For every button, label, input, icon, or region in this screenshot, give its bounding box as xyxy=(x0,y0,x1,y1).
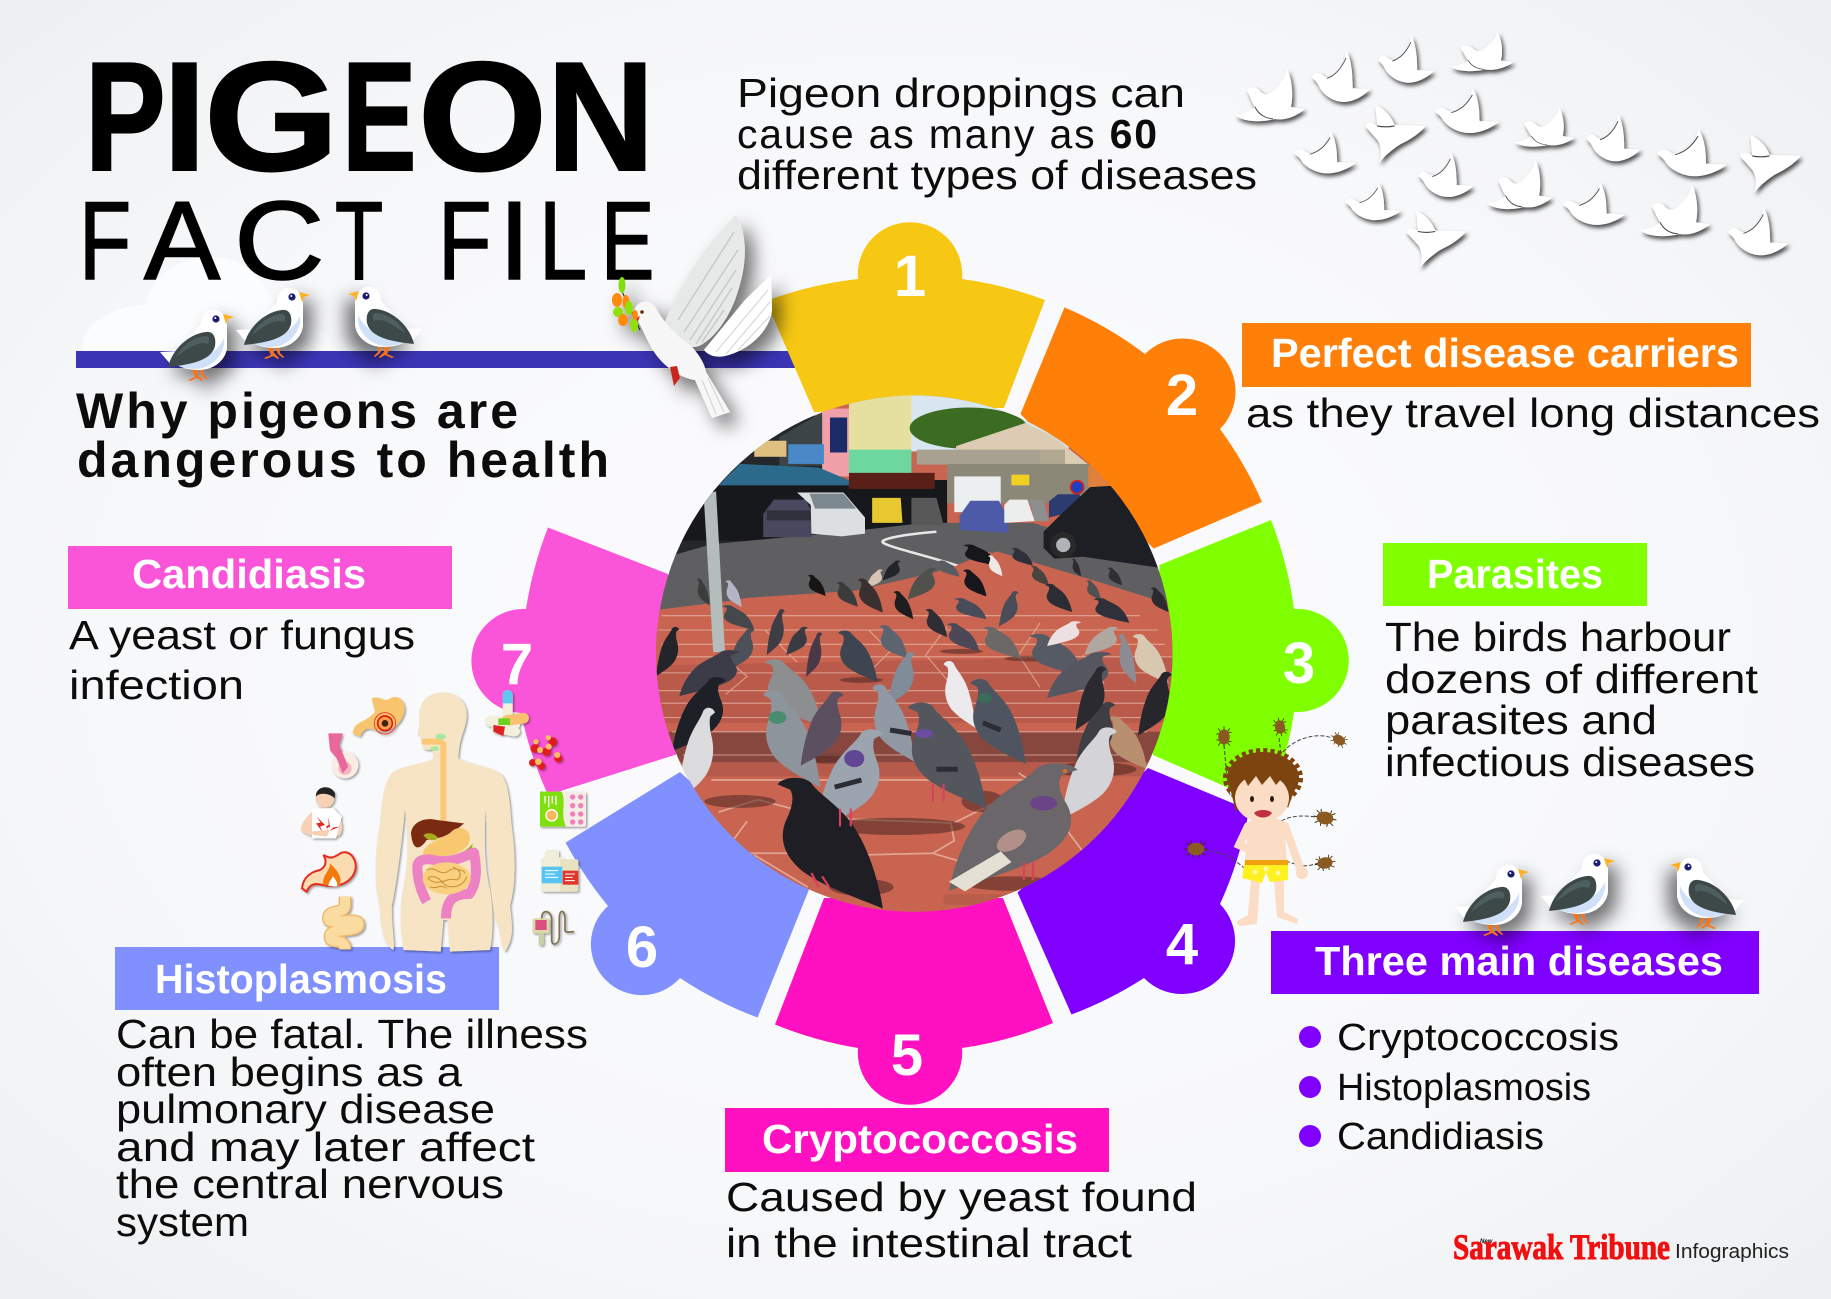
text: parasites description xyxy=(1385,614,1759,785)
intro text: different types of diseases xyxy=(737,152,1257,198)
text: candidiasis description: A yeast or fungus xyxy=(69,612,415,658)
text: candidiasis description: infection xyxy=(69,662,244,708)
title: PIGEON xyxy=(85,30,654,204)
text: as they travel long distances: as they travel long distances xyxy=(1246,390,1820,436)
bullet list: three diseases: Candidiasis xyxy=(1337,1116,1544,1158)
text: parasites description: infectious diseases xyxy=(1385,739,1755,785)
number 7: 7 xyxy=(501,632,533,697)
title: FACT FILE: F xyxy=(438,179,492,303)
cloud xyxy=(83,257,332,351)
label: Three main diseases xyxy=(1271,931,1759,994)
bird on bar 1 xyxy=(160,310,234,381)
title: PIGEON: E xyxy=(342,30,416,203)
photo lamp post xyxy=(704,491,725,652)
text: histoplasmosis description: and may later affect xyxy=(116,1124,536,1170)
text: histoplasmosis description: pulmonary disease xyxy=(116,1086,495,1132)
text: cryptococcosis description: Caused by yeast found xyxy=(726,1174,1197,1220)
text: histoplasmosis description: Can be fatal. The illness xyxy=(116,1011,588,1057)
title: FACT FILE: C xyxy=(234,180,325,303)
bugs xyxy=(1184,717,1350,872)
title: PIGEON: O xyxy=(418,31,547,204)
text: histoplasmosis description: system xyxy=(116,1199,249,1245)
label: Perfect disease carriers: Perfect disease carriers xyxy=(1271,330,1739,376)
logo: Sarawak Tribune Infographics: Infographics xyxy=(1675,1241,1789,1263)
icon: capsules xyxy=(484,690,530,737)
title: FACT FILE: A xyxy=(144,179,220,303)
label: Candidiasis xyxy=(68,546,452,609)
logo: Sarawak Tribune Infographics: New xyxy=(1480,1239,1493,1245)
text: histoplasmosis description: often begins as a xyxy=(116,1049,462,1095)
segment 5 magenta xyxy=(775,898,1053,1105)
icon: flock of white doves xyxy=(1235,32,1801,268)
bird on label 2 xyxy=(1541,854,1615,925)
icon: tablet blister pack xyxy=(540,792,586,827)
intro text: cause as many as 60 xyxy=(737,111,1157,157)
subtitle xyxy=(76,383,609,488)
number 5: 5 xyxy=(891,1023,923,1088)
segment 6 periwinkle xyxy=(566,772,809,1018)
label: Cryptococcosis xyxy=(725,1108,1109,1172)
digestive organs xyxy=(411,734,476,918)
icon: endoscope xyxy=(533,911,574,945)
title: FACT FILE: I xyxy=(499,179,530,303)
text: parasites description: The birds harbour xyxy=(1385,614,1731,660)
subtitle: dangerous to health xyxy=(77,432,609,488)
label: Perfect disease carriers xyxy=(1242,323,1751,387)
photo pigeons xyxy=(656,544,1172,909)
text: parasites description: dozens of different xyxy=(1385,656,1759,702)
segment 2 orange xyxy=(1020,307,1262,549)
text: histoplasmosis description: the central nervous xyxy=(116,1161,504,1207)
text: cryptococcosis description: in the intestinal tract xyxy=(726,1220,1133,1266)
photo shadows xyxy=(704,649,1136,896)
bird on label 3 xyxy=(1670,858,1744,929)
bird on bar 2 xyxy=(236,288,310,359)
bird on label 1 xyxy=(1455,865,1529,936)
segment 4 purple xyxy=(1018,768,1249,1014)
icon: intestine xyxy=(328,897,358,949)
segment 7 pink xyxy=(471,528,676,795)
number 1: 1 xyxy=(894,244,926,309)
label: Histoplasmosis: Histoplasmosis xyxy=(155,956,447,1002)
label: Histoplasmosis xyxy=(115,947,499,1010)
icon: stomach with flame xyxy=(302,852,356,892)
central photo: pigeons on red paving xyxy=(656,395,1172,912)
photo cars xyxy=(763,481,1158,567)
icon: pills xyxy=(529,735,562,770)
wheel of seven segments xyxy=(471,222,1349,1105)
bullet list: three diseases: Histoplasmosis xyxy=(1337,1067,1591,1109)
bullet list: three diseases: Cryptococcosis xyxy=(1337,1017,1619,1059)
bullet list: three diseases xyxy=(1299,1017,1619,1158)
icon: white dove with olive branch xyxy=(612,215,772,418)
label: Candidiasis: Candidiasis xyxy=(132,551,366,597)
number 3: 3 xyxy=(1283,631,1315,696)
intro text xyxy=(737,70,1257,198)
photo pigeon markings xyxy=(769,693,1067,891)
number 2: 2 xyxy=(1166,363,1198,428)
label: Parasites: Parasites xyxy=(1427,551,1603,597)
purple perch bar xyxy=(76,351,806,368)
text: candidiasis description xyxy=(69,612,415,708)
icon: medicine bottles xyxy=(541,850,578,892)
label: Cryptococcosis: Cryptococcosis xyxy=(762,1116,1078,1162)
label: Three main diseases: Three main diseases xyxy=(1315,938,1723,984)
bird on bar 3 xyxy=(348,287,422,358)
title: FACT FILE: E xyxy=(601,179,654,303)
icon: stomach with tumour xyxy=(353,697,405,737)
text: histoplasmosis description xyxy=(116,1011,588,1245)
title: PIGEON: N xyxy=(547,30,654,204)
title: FACT FILE: L xyxy=(539,180,587,304)
title: FACT FILE: F xyxy=(79,178,131,303)
segment 3 lime xyxy=(1153,520,1349,805)
text: cryptococcosis description xyxy=(726,1174,1197,1266)
illustration: itchy boy with parasites xyxy=(1184,717,1350,926)
number 4: 4 xyxy=(1166,912,1198,977)
title: FACT FILE xyxy=(79,178,654,304)
title: PIGEON: I xyxy=(163,30,206,203)
human body silhouette xyxy=(376,693,515,952)
illustration: human digestive system with icons xyxy=(301,690,586,952)
segment 1 yellow xyxy=(766,222,1045,412)
icon: intestine lining xyxy=(328,733,358,778)
logo: Sarawak Tribune Infographics: Sarawak Tribune xyxy=(1453,1227,1670,1267)
number 6: 6 xyxy=(626,915,658,980)
title: PIGEON: P xyxy=(85,31,166,203)
subtitle: Why pigeons are xyxy=(76,383,518,439)
label: Parasites xyxy=(1383,543,1647,606)
text: parasites description: parasites and xyxy=(1385,697,1657,743)
title: FACT FILE: T xyxy=(335,180,383,303)
title: PIGEON: G xyxy=(204,30,339,203)
intro text: Pigeon droppings can xyxy=(737,70,1185,116)
icon: man with abdominal pain xyxy=(301,787,342,838)
